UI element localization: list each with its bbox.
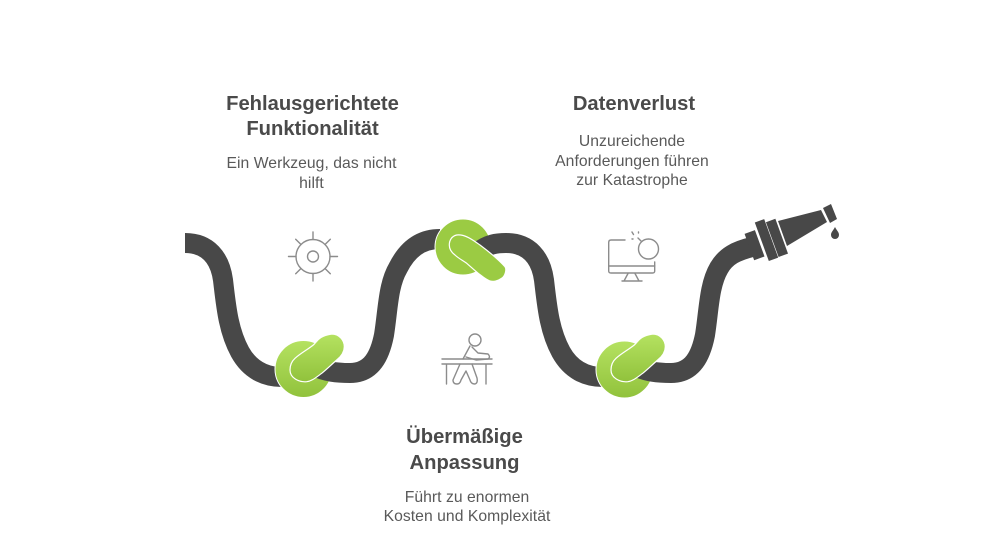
hose segment: left [185, 243, 282, 377]
text: Kosten und Komplexität [384, 508, 551, 525]
hose with knots [185, 204, 839, 398]
knot 2 [435, 219, 603, 377]
knot 1 [275, 239, 440, 398]
text: Funktionalität [246, 118, 379, 140]
icon: monitor with bomb [609, 232, 658, 281]
text: Anpassung [410, 452, 519, 474]
icon: sun gear [288, 232, 338, 281]
text: Ein Werkzeug, das nicht hilft: Ein Werkzeug, das nicht [226, 155, 397, 172]
knot 3 and hose to nozzle [596, 247, 752, 398]
nozzle [745, 204, 839, 261]
water drop [831, 227, 839, 239]
text: Führt zu enormen Kosten und Komplexität: Führt zu enormen [405, 489, 529, 506]
text: hilft [299, 175, 324, 192]
heading: Datenverlust: Datenverlust [573, 93, 695, 115]
text: zur Katastrophe [576, 172, 688, 189]
text: Anforderungen führen [555, 153, 709, 170]
heading: Übermäßige Anpassung: Übermäßige [406, 425, 523, 448]
icon: person at desk [442, 334, 492, 384]
heading: Fehlausgerichtete Funktionalität: Fehlausgerichtete [226, 93, 399, 115]
text: Unzureichende Anforderungen führen zur Katastrophe: Unzureichende [579, 133, 685, 150]
